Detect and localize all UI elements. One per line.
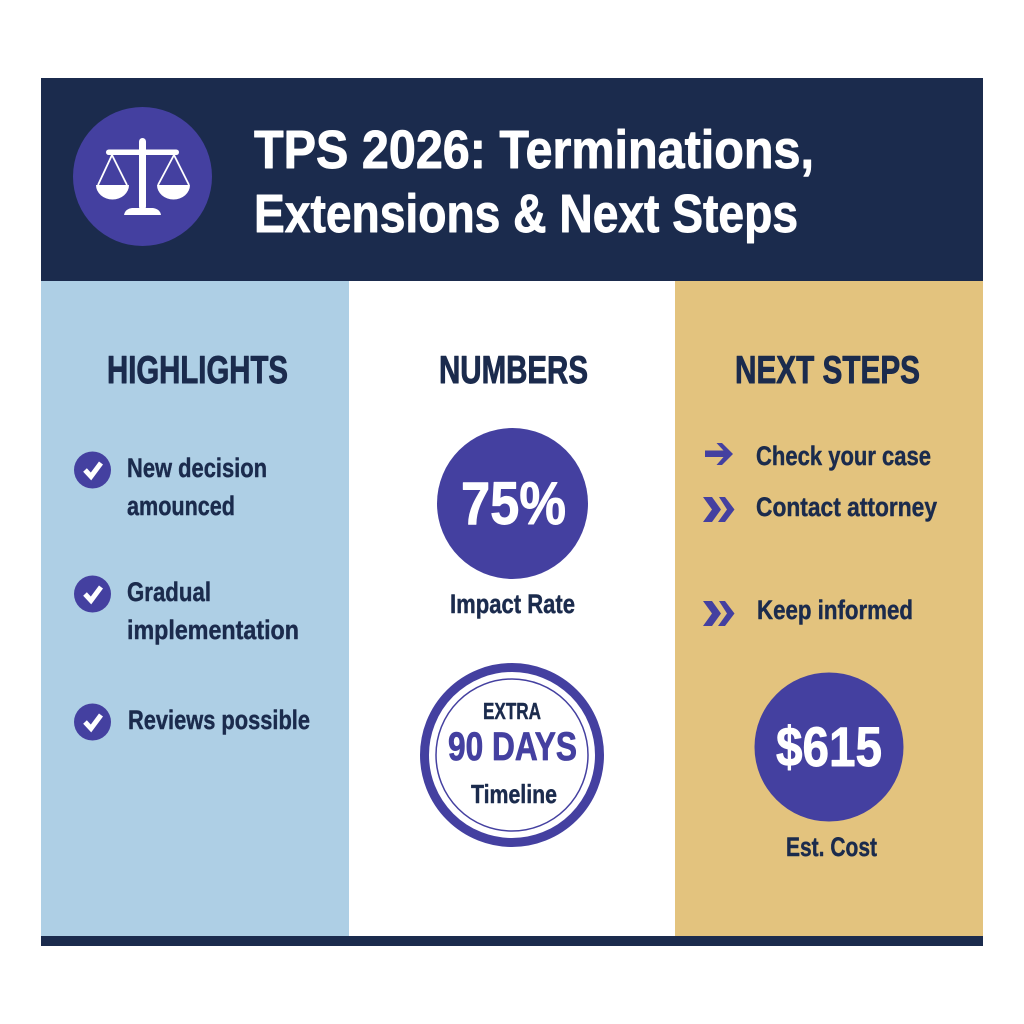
panel: highlights xyxy=(41,281,349,936)
highlight item: reviews possible: Reviews possible xyxy=(128,705,310,735)
heading: highlights: HIGHLIGHTS xyxy=(107,349,288,392)
badge: extra 90 days timeline: 90 DAYS xyxy=(448,725,577,769)
badge: extra 90 days timeline xyxy=(424,668,600,842)
step: check your case xyxy=(705,441,931,471)
highlight item: new decision: amounced xyxy=(127,491,235,521)
stat: $615 estimated cost xyxy=(754,672,904,862)
badge: extra 90 days timeline: Timeline xyxy=(471,779,557,809)
highlight item: new decision xyxy=(74,452,267,521)
stat: 75% impact rate: 75% xyxy=(461,470,566,537)
highlight item: reviews possible xyxy=(74,704,310,740)
header banner xyxy=(41,78,983,281)
highlight item: gradual implementation: Gradual xyxy=(127,577,211,607)
title xyxy=(254,120,814,244)
step: check your case: Check your case xyxy=(756,441,931,471)
heading: numbers: NUMBERS xyxy=(439,349,588,392)
stat: $615 estimated cost: $615 xyxy=(776,715,882,778)
stat: $615 estimated cost: Est. Cost xyxy=(786,832,877,862)
panel: next steps xyxy=(675,281,983,936)
heading: next steps: NEXT STEPS xyxy=(735,349,920,392)
title: TPS 2026: Terminations, xyxy=(254,120,814,180)
title: Extensions & Next Steps xyxy=(254,184,798,244)
step: keep informed: Keep informed xyxy=(757,595,913,625)
footer bar xyxy=(41,936,983,946)
highlight item: gradual implementation xyxy=(74,576,299,645)
badge: extra 90 days timeline: EXTRA xyxy=(483,698,541,724)
highlight item: new decision: New decision xyxy=(127,453,267,483)
step: contact attorney xyxy=(703,492,937,522)
panel: numbers xyxy=(349,281,675,936)
step: keep informed xyxy=(703,595,913,626)
highlight item: gradual implementation: implementation xyxy=(127,615,299,645)
stat: 75% impact rate: Impact Rate xyxy=(450,589,575,619)
stat: 75% impact rate xyxy=(437,428,588,619)
step: contact attorney: Contact attorney xyxy=(756,492,937,522)
icon: scales of justice xyxy=(73,107,212,246)
